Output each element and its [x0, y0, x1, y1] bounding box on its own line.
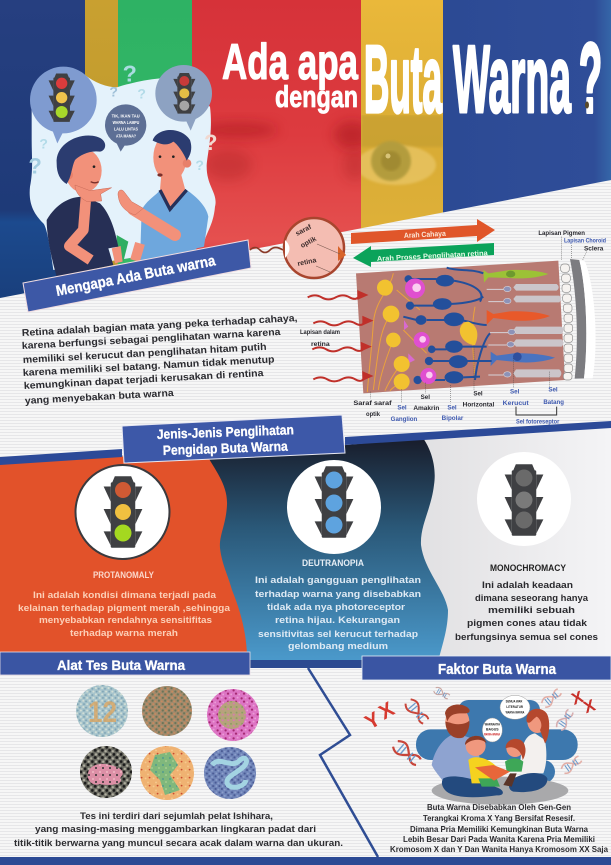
retina cross-section diagram: Lapisan Choroid [564, 239, 606, 245]
speech bubble: question: LALU LINTAS [114, 127, 138, 133]
boy [465, 736, 500, 787]
retina explanation text: memiliki sel kerucut dan penglihatan hitam putih [23, 342, 267, 366]
hero colour stripes with face [0, 0, 611, 300]
icon: monochromacy traffic light [477, 452, 571, 546]
plate 1 [76, 685, 128, 737]
text: deutranopia description: sensitivitas sel kerucut terhadap [258, 628, 418, 639]
heading: monochromacy: MONOCHROMACY [490, 563, 567, 574]
mother [509, 709, 549, 792]
chromosomes and DNA strands: Y [361, 707, 385, 734]
question marks: ? [39, 135, 48, 151]
eye diagram: retina [297, 257, 317, 268]
text: factor explanation [390, 803, 608, 854]
thought bubble: right traffic light [155, 65, 212, 131]
text: Ishihara explanation: titik-titik berwarna yang muncul secara acak dalam warna dan ukuran. [14, 837, 343, 848]
diagram labels: retina [311, 342, 330, 348]
bottom blue strip [0, 857, 611, 865]
diagram labels: Sel [421, 395, 430, 401]
plate 6 [204, 747, 256, 799]
nerve fibres [367, 273, 475, 392]
speech bubble: question: TIK, IKAN TAU [112, 113, 140, 119]
retina explanation text: karena memiliki sel batang. Namun tidak menutup [23, 354, 275, 379]
blue backdrop [416, 700, 578, 783]
title [222, 23, 602, 133]
chromosomes and DNA strands [361, 686, 598, 775]
diagram labels: Horizontal [463, 402, 495, 408]
lower section background [0, 660, 611, 860]
girl [503, 739, 526, 787]
panel: deutranopia [205, 438, 448, 662]
icon: deutranopia traffic light [287, 460, 381, 554]
panel: types of colour blindness background [0, 426, 611, 660]
eye diagram [250, 218, 346, 278]
man left [47, 136, 123, 277]
arrow: arah cahaya: Arah Cahaya [404, 229, 447, 240]
text: Ishihara explanation [14, 810, 343, 848]
heading: Alat Tes Buta Warna: Alat Tes Buta Warna [57, 657, 185, 673]
thought bubble: left traffic light [30, 67, 97, 143]
photoreceptors [483, 270, 563, 377]
bracket for photoreceptor cells [516, 407, 557, 415]
text: protanomaly description [18, 590, 231, 638]
text: deutranopia description: gelombang medium [288, 640, 388, 651]
heading: Faktor Buta Warna [362, 656, 611, 680]
leader lines [371, 237, 587, 403]
speech bubble: child: WARNA-WARNA [484, 732, 500, 736]
diagram labels: optik [366, 412, 381, 418]
speech bubble: question [105, 104, 146, 152]
retina cross-section diagram: Sel [447, 405, 457, 411]
diagram labels: Sclera [584, 247, 604, 253]
plate 5 [140, 746, 194, 800]
text: factor explanation: Terangkai Kroma X Yang Bersifat Resesif. [423, 814, 575, 823]
speech bubble: child: WARNANYA [485, 722, 500, 726]
heading: protanomaly: PROTANOMALY [93, 570, 154, 580]
plate 3 [207, 689, 259, 741]
text: monochromacy description [455, 579, 598, 642]
heading: Jenis-Jenis Penglihatan Pengidap Buta Warna [122, 415, 345, 463]
pigment layer [561, 264, 573, 380]
retina cross-section diagram: Ganglion [391, 417, 418, 423]
book [475, 765, 510, 781]
chromosomes and DNA strands: X [569, 687, 586, 709]
arrow: arah proses penglihatan retina [353, 243, 494, 267]
speech bubble: question: WARNA LAMPU [113, 120, 140, 126]
text: deutranopia description: retina hijau. Kekurangan [275, 614, 400, 625]
incoming light waves [308, 292, 371, 381]
ground shadow [432, 777, 568, 805]
retina cross-section diagram [300, 231, 606, 425]
arrow: arah proses penglihatan retina: Arah Proses Penglihatan retina [377, 250, 488, 263]
Ishihara test plates [76, 685, 259, 800]
retina cross-section diagram: Sel [397, 405, 407, 411]
retina cross-section diagram: Sel fotoreseptor [516, 419, 560, 425]
text: protanomaly description: kelainan terhadap pigment merah ,sehingga [18, 603, 231, 613]
retina cross-section diagram: Sel [548, 388, 558, 394]
arrow: arah cahaya [351, 219, 495, 244]
text: Ishihara explanation: yang masing-masing menggambarkan lingkaran padat dari [35, 823, 316, 834]
diagram labels: Saraf saraf [353, 401, 392, 407]
plate 4 [80, 746, 132, 798]
panel: protanomaly [0, 452, 247, 655]
speech bubble: parent: LITERATUR [506, 704, 523, 709]
question marks: ? [123, 61, 137, 87]
text: factor explanation: Lebih Besar Dari Pada Wanita Karena Pria Memiliki [403, 835, 595, 844]
text: Ishihara explanation: Tes ini terdiri dari sejumlah pelat Ishihara, [80, 810, 273, 821]
diagram labels [300, 231, 604, 418]
text: protanomaly description: menyebabkan rendahnya sensitifitas [39, 615, 212, 625]
question marks: ? [109, 84, 118, 100]
ganglion cells [377, 280, 477, 390]
text: monochromacy description: berfungsinya semua sel cones [455, 631, 598, 642]
retina explanation text: yang menyebakan buta warna [25, 388, 175, 407]
speech cloud background [30, 75, 216, 270]
text: protanomaly description: terhadap warna merah [70, 628, 178, 638]
title: Buta [364, 26, 442, 133]
plate 2 [142, 686, 192, 736]
diagram labels: Lapisan dalam [300, 330, 340, 336]
illustration: family with chromosomes [361, 686, 598, 805]
blue connector strip [250, 660, 611, 668]
speech bubble: question: ATA MANA? [116, 133, 136, 139]
bipolar cells [403, 268, 492, 384]
text: deutranopia description: Ini adalah gangguan penglihatan [255, 574, 421, 585]
man right [118, 130, 208, 262]
illustration: two men talking [28, 61, 217, 277]
text: monochromacy description: pigmen cones atau tidak [467, 617, 588, 628]
heading: Jenis-Jenis Penglihatan Pengidap Buta Warna: Pengidap Buta Warna [163, 439, 288, 458]
heading: Mengapa Ada Buta warna [23, 240, 251, 312]
text: monochromacy description: dimana seseorang hanya [475, 592, 589, 603]
panel: monochromacy [455, 452, 598, 642]
retina cross-section diagram: Batang [543, 400, 564, 406]
heading: Mengapa Ada Buta warna: Mengapa Ada Buta warna [55, 252, 217, 300]
amacrine cells [404, 278, 436, 384]
question marks: ? [204, 130, 217, 155]
chromosomes and DNA strands: X [375, 697, 399, 724]
speech bubble: parent: SEMUA WAR [506, 699, 522, 704]
father [432, 705, 503, 797]
question marks: ? [195, 157, 204, 173]
question marks: ? [28, 153, 42, 178]
text: deutranopia description: tidak ada nya photoreceptor [267, 601, 405, 612]
speech bubble: child: BAGUS [486, 727, 499, 731]
heading: Jenis-Jenis Penglihatan Pengidap Buta Warna: Jenis-Jenis Penglihatan [157, 422, 294, 442]
text: factor explanation: Buta Warna Disebabkan Oleh Gen-Gen [427, 803, 571, 812]
question marks: ? [137, 85, 146, 101]
retina cross-section diagram: Bipolar [442, 416, 464, 422]
plate 1: 12 [88, 696, 117, 729]
retina cross-section diagram: Kerucut [503, 401, 529, 407]
retina explanation text: karena berfungsi sebagai penglihatan warna karena [22, 327, 281, 352]
choroid and sclera [570, 259, 586, 379]
zigzag divider [308, 668, 378, 857]
eye diagram: saraf [295, 223, 313, 238]
text: deutranopia description [255, 574, 421, 651]
eye diagram: optik [300, 236, 318, 250]
chromosomes and DNA strands: X [581, 695, 598, 717]
retina explanation text: Retina adalah bagian mata yang peka terhadap cahaya, [22, 313, 298, 339]
retina explanation text [22, 313, 298, 407]
text: factor explanation: Dimana Pria Memiliki Kemungkinan Buta Warna [410, 825, 588, 834]
text: deutranopia description: terhadap warna yang disebabkan [255, 588, 421, 599]
icon: protanomaly traffic light [76, 465, 170, 559]
diagram labels: Sel [473, 392, 483, 398]
diagram labels: Amakrin [413, 406, 440, 412]
text: monochromacy description: Ini adalah keadaan [482, 579, 573, 590]
text: factor explanation: Kromosom X dan Y Dan Wanita Hanya Kromosom XX Saja [390, 845, 608, 854]
retina cross-section diagram: Sel [510, 389, 520, 395]
diagram labels: Lapisan Pigmen [538, 231, 585, 237]
text: protanomaly description: Ini adalah kondisi dimana terjadi pada [33, 590, 217, 600]
title: dengan [275, 79, 358, 114]
question marks [28, 61, 217, 178]
heading: deutranopia: DEUTRANOPIA [302, 558, 364, 569]
retina explanation text: kemungkinan dapat terjadi kerusakan di rentina [24, 368, 264, 392]
heading: Alat Tes Buta Warna [0, 652, 250, 675]
heading: Faktor Buta Warna: Faktor Buta Warna [438, 662, 557, 678]
speech bubble: child [482, 718, 502, 742]
title: Ada apa [222, 34, 359, 90]
green gap [117, 235, 128, 263]
retina tissue [356, 261, 565, 393]
speech bubble: parent: WARNA WARNA [506, 709, 524, 714]
speech bubble: parent [500, 695, 530, 719]
blue divider strips [0, 421, 611, 465]
text: monochromacy description: memiliki sebuah [488, 604, 575, 615]
